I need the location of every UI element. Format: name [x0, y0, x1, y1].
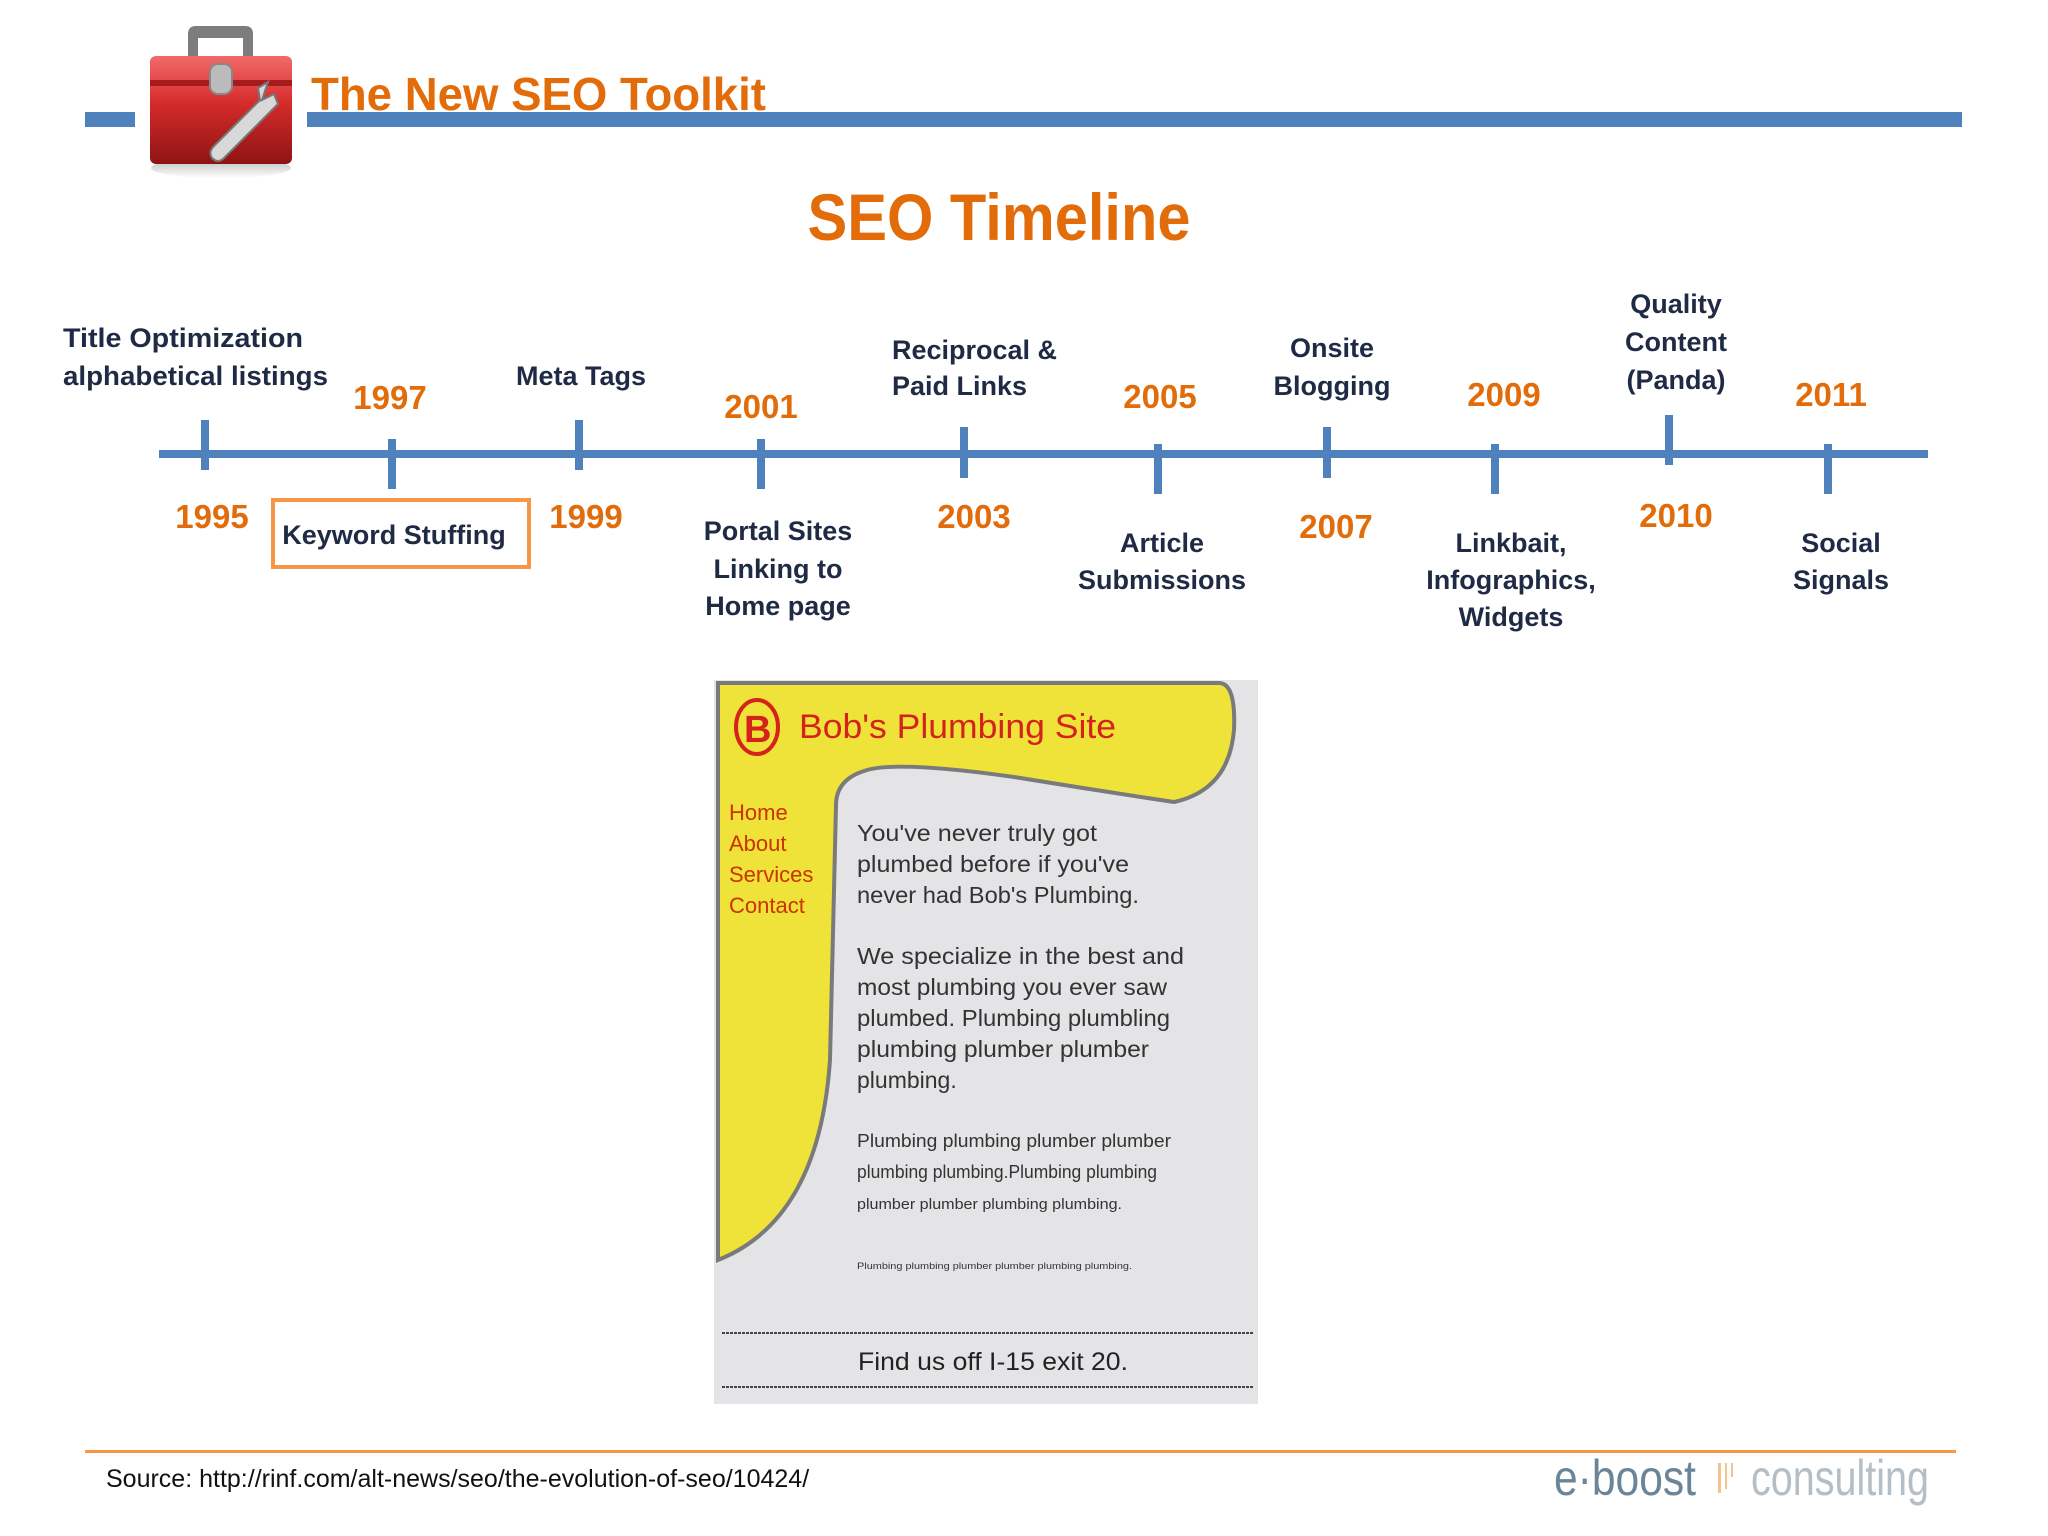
- body copy: most plumbing you ever saw: [857, 974, 1167, 1000]
- years: 1997: [353, 379, 427, 416]
- body copy: Plumbing plumbing plumber plumber plumbing plumbing.: [857, 1261, 1132, 1271]
- body copy: We specialize in the best and: [857, 943, 1184, 969]
- footer line: [85, 1450, 1956, 1453]
- logo B: B: [744, 709, 771, 751]
- main title: SEO Timeline: [808, 180, 1190, 254]
- callout: keyword stuffing: Keyword Stuffing: [282, 520, 506, 550]
- callout: keyword stuffing: [273, 500, 529, 567]
- source text: Source: http://rinf.com/alt-news/seo/the-evolution-of-seo/10424/: [106, 1465, 809, 1493]
- years: 2005: [1123, 378, 1197, 415]
- logo: e-boost consulting: e·boost: [1554, 1450, 1696, 1506]
- label: reciprocal: Reciprocal &: [892, 335, 1057, 365]
- timeline axis: [159, 415, 1928, 494]
- body copy: plumbed before if you've: [857, 851, 1129, 877]
- screenshot: Bob's Plumbing Site: [714, 680, 1258, 1404]
- label: social signals: Social: [1801, 528, 1881, 558]
- years: 1999: [549, 498, 623, 535]
- years: 2001: [724, 388, 798, 425]
- logo B: [736, 700, 778, 754]
- milestone labels: [63, 289, 1889, 632]
- body copy: never had Bob's Plumbing.: [857, 882, 1139, 908]
- logo: e-boost consulting: [1554, 1450, 1929, 1506]
- label: meta tags: Meta Tags: [516, 361, 646, 391]
- label: portal sites: Linking to: [714, 554, 842, 584]
- years: 2009: [1467, 376, 1541, 413]
- label: linkbait: Linkbait,: [1455, 528, 1567, 558]
- label: social signals: Signals: [1793, 565, 1889, 595]
- years: 2003: [937, 498, 1011, 535]
- years: 2010: [1639, 497, 1713, 534]
- logo: e-boost consulting: consulting: [1751, 1450, 1929, 1506]
- header title: The New SEO Toolkit: [311, 68, 766, 120]
- label: portal sites: Home page: [705, 591, 851, 621]
- nav: Home: [729, 800, 788, 825]
- label: onsite blogging: Onsite: [1290, 333, 1374, 363]
- nav: [729, 800, 813, 918]
- label: portal sites: Portal Sites: [704, 516, 852, 546]
- years: [175, 376, 1867, 545]
- label: quality content: (Panda): [1626, 365, 1726, 395]
- body copy: plumbing plumber plumber: [857, 1036, 1149, 1062]
- body copy: plumbed. Plumbing plumbling: [857, 1005, 1170, 1031]
- years: 2007: [1299, 508, 1373, 545]
- label: linkbait: Infographics,: [1426, 565, 1596, 595]
- label: title optimization: alphabetical listings: [63, 361, 328, 391]
- label: linkbait: Widgets: [1459, 602, 1563, 632]
- label: title optimization: [63, 323, 328, 391]
- body copy: You've never truly got: [857, 820, 1098, 846]
- screenshot: Bob's Plumbing Site: Bob's Plumbing Site: [799, 708, 1116, 746]
- body copy: plumbing.: [857, 1067, 957, 1093]
- nav: About: [729, 831, 786, 856]
- body copy: plumber plumber plumbing plumbing.: [857, 1196, 1122, 1213]
- body copy: [857, 820, 1184, 1271]
- label: reciprocal: Paid Links: [892, 371, 1027, 401]
- years: 2011: [1795, 376, 1867, 413]
- header bar: [85, 112, 1962, 127]
- nav: Services: [729, 862, 813, 887]
- body copy: Plumbing plumbing plumber plumber: [857, 1131, 1171, 1151]
- years: 1995: [175, 498, 249, 535]
- label: onsite blogging: Blogging: [1274, 371, 1390, 401]
- screenshot: Bob's Plumbing Site: Find us off I-15 exit 20.: [858, 1348, 1128, 1376]
- nav: Contact: [729, 893, 805, 918]
- body copy: plumbing plumbing.Plumbing plumbing: [857, 1162, 1157, 1182]
- label: title optimization: Title Optimization: [63, 323, 303, 353]
- icon: toolbox: [150, 26, 292, 178]
- label: article submissions: Submissions: [1078, 565, 1246, 595]
- label: quality content: Quality: [1630, 289, 1722, 319]
- label: article submissions: Article: [1120, 528, 1204, 558]
- label: quality content: Content: [1625, 327, 1727, 357]
